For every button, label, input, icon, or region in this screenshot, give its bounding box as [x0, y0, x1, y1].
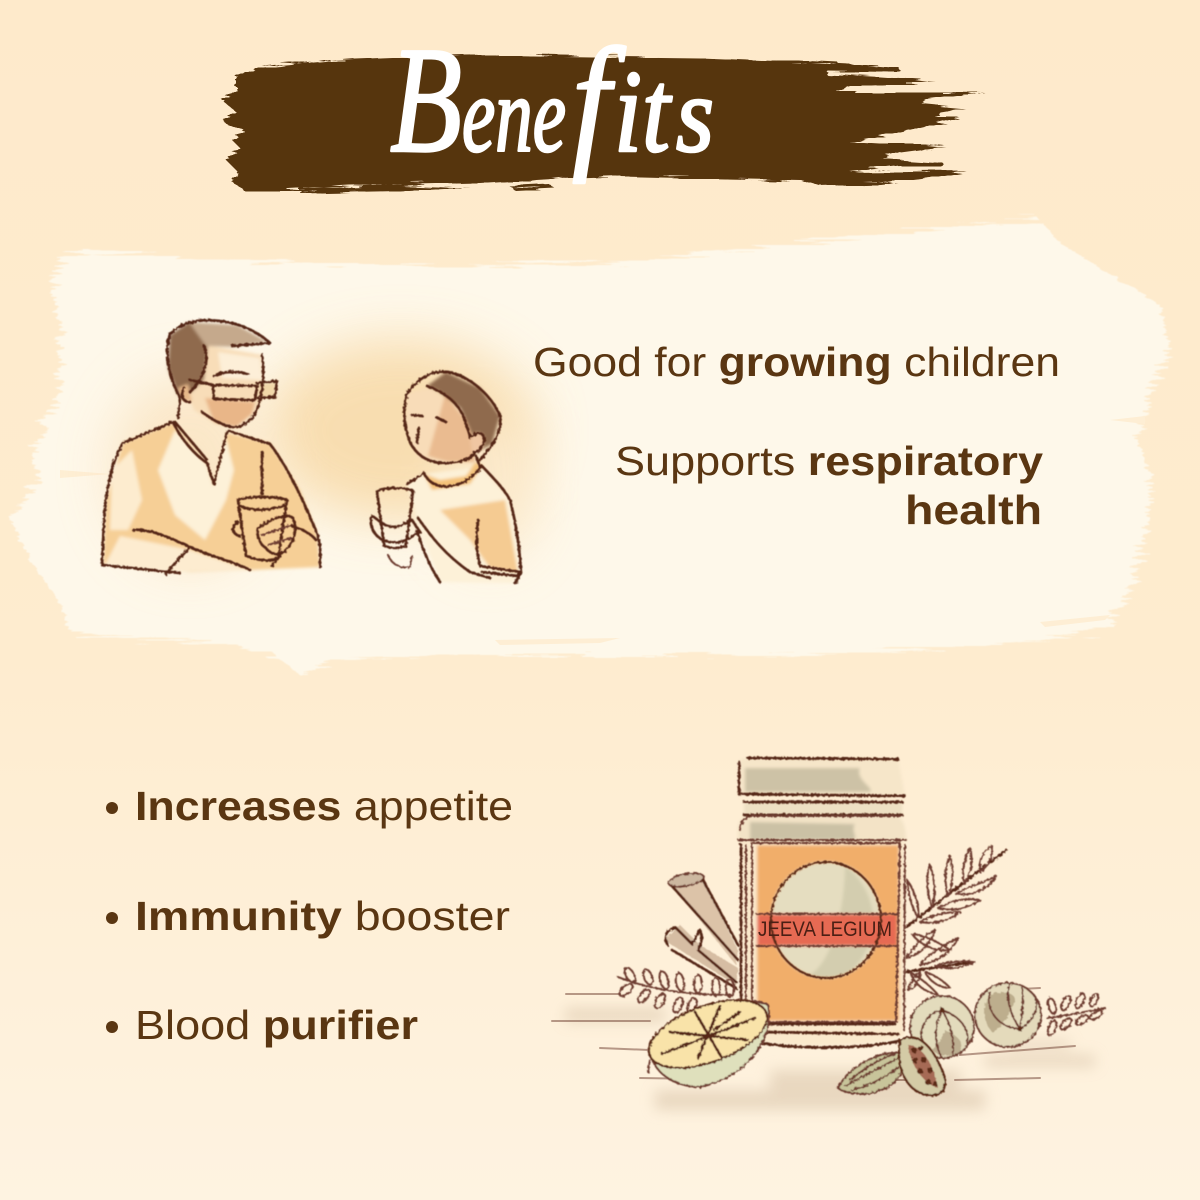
cardamom open pod [899, 1037, 945, 1095]
table wash streaks [552, 988, 1095, 1110]
bullet: immunity booster: Immunity booster [135, 893, 510, 939]
panel: cream brush area [10, 220, 1170, 675]
title: f [572, 18, 626, 184]
watercolor wash [110, 340, 540, 565]
text: good for growing children: Good for growing children [533, 339, 1060, 385]
man figure [102, 320, 320, 574]
jar outlines [738, 758, 906, 1048]
text: supports respiratory health: health [905, 487, 1042, 533]
herb: far right leaf sprig [1046, 992, 1105, 1037]
jar label name: JEEVA LEGIUM [758, 918, 892, 941]
amla fruit 2 [975, 983, 1041, 1047]
text: supports respiratory health: Supports respiratory [615, 438, 1043, 484]
title: s [676, 56, 714, 175]
herb: right fern [905, 846, 1006, 995]
illustration: Jeeva Legium jar with herbs and fruits [552, 758, 1105, 1110]
boy figure [371, 372, 521, 583]
text: supports respiratory health [615, 438, 1043, 533]
cardamom pod [838, 1053, 905, 1094]
illustration: man and boy with glasses of drink [102, 320, 540, 583]
bullet: increases appetite: Increases appetite [135, 783, 513, 829]
herb: sticks [664, 871, 738, 988]
title brush stroke [222, 55, 985, 193]
title: it [614, 46, 673, 177]
herb: left leaf sprig [617, 966, 734, 1015]
lemon half [640, 986, 776, 1087]
title: ene [462, 56, 566, 175]
amla fruit 1 [910, 996, 974, 1058]
jar fills [738, 758, 906, 1046]
title: B [390, 16, 462, 184]
jar [738, 758, 906, 1048]
bullet: blood purifier: Blood purifier [135, 1002, 418, 1048]
